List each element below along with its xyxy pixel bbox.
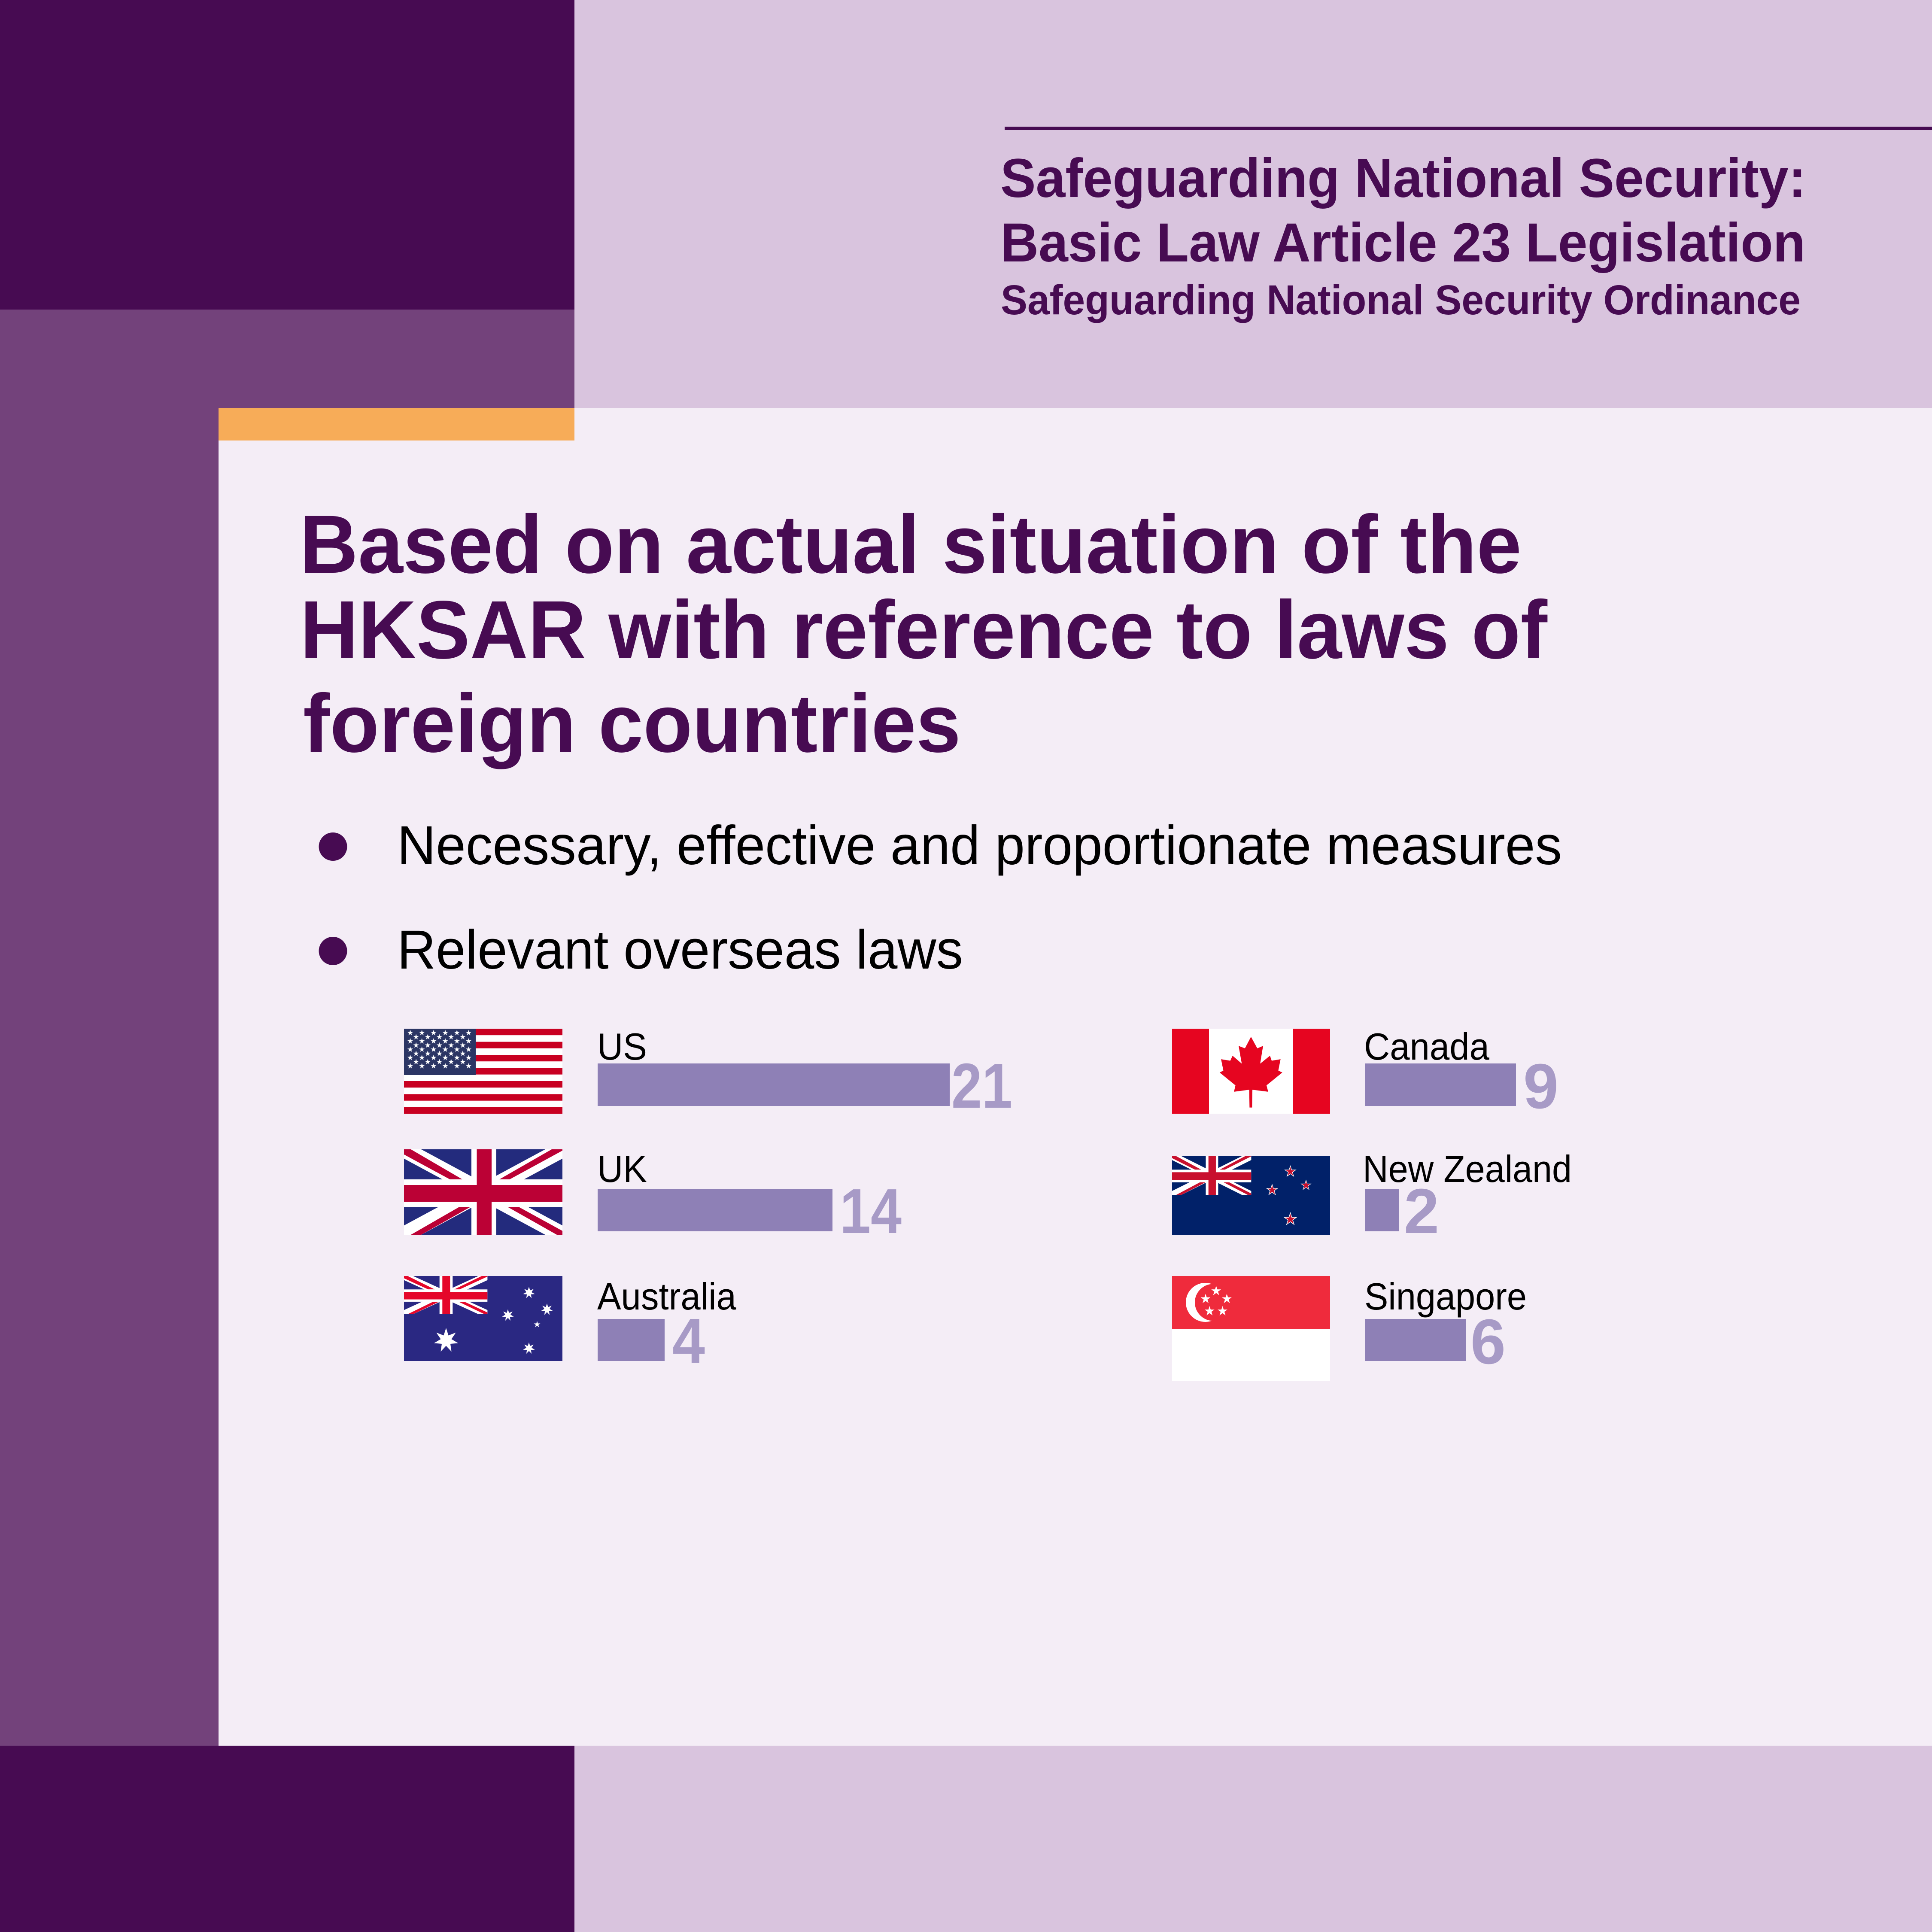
flag: United States: [404, 1029, 562, 1114]
header title block: Safeguarding National Security:: [1000, 148, 1806, 209]
flag: Canada: [1172, 1029, 1330, 1114]
value: 6: 6: [1470, 1306, 1506, 1377]
label: Australia: Australia: [597, 1275, 736, 1318]
label: Singapore: Singapore: [1364, 1275, 1527, 1318]
flag: New Zealand: [1172, 1156, 1330, 1235]
main heading: HKSAR with reference to laws of: [300, 583, 1548, 676]
main heading: foreign countries: [303, 677, 961, 769]
accent bar: orange: [219, 408, 574, 440]
bar: Australia 4: [598, 1319, 665, 1361]
flag: United Kingdom: [404, 1149, 562, 1235]
label: UK: UK: [597, 1148, 647, 1190]
header rule: [1005, 127, 1932, 130]
value: 9: 9: [1523, 1051, 1558, 1122]
header title block: Basic Law Article 23 Legislation: [1000, 212, 1805, 273]
panel: main content area: [219, 408, 1932, 1746]
label: New Zealand: New Zealand: [1363, 1148, 1572, 1190]
bar: UK 14: [598, 1189, 832, 1231]
main heading: [300, 498, 1548, 769]
bar: New Zealand 2: [1365, 1189, 1399, 1231]
bullet: necessary measures: Necessary, effective and proportionate measures: [397, 815, 1562, 876]
flag: Australia: [404, 1276, 562, 1361]
label: Canada: Canada: [1364, 1025, 1489, 1068]
flag: Singapore: [1172, 1276, 1330, 1381]
value: 21: 21: [951, 1051, 1012, 1121]
bar: US 21: [598, 1063, 950, 1106]
panel: mid purple side band: [0, 310, 574, 1746]
bar: Singapore 6: [1365, 1319, 1466, 1361]
value: 14: 14: [840, 1176, 902, 1247]
bullet: relevant overseas laws: Relevant overseas laws: [397, 919, 963, 981]
value: 2: 2: [1404, 1176, 1439, 1247]
panel: top-left dark block: [0, 0, 574, 310]
panel: bottom-left dark block: [0, 1746, 574, 1932]
header title block: [1000, 148, 1806, 323]
label: US: US: [597, 1025, 647, 1068]
bar: Canada 9: [1365, 1063, 1516, 1106]
main heading: Based on actual situation of the: [300, 498, 1522, 590]
header title block: Safeguarding National Security Ordinance: [1001, 276, 1801, 323]
value: 4: 4: [672, 1306, 705, 1376]
